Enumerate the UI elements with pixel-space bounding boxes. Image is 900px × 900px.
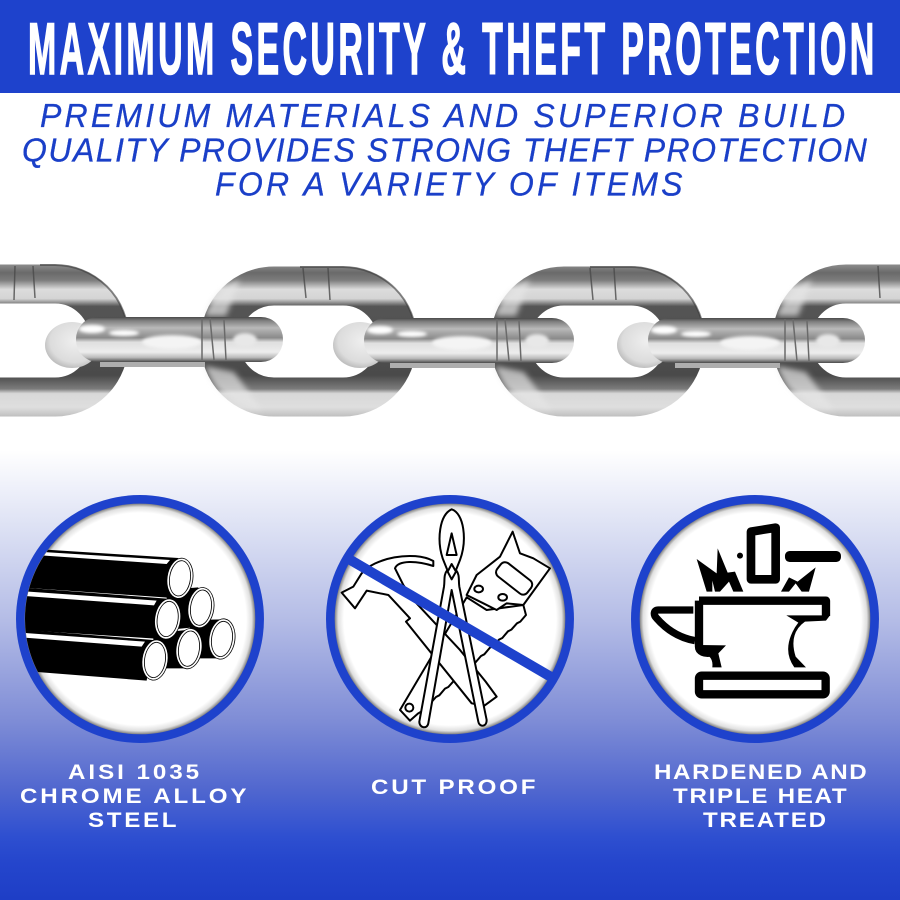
hammer <box>342 556 497 706</box>
back row pipes <box>153 587 223 668</box>
subtitle text block: QUALITY PROVIDES STRONG THEFT PROTECTION <box>22 132 867 169</box>
side-on link 3 <box>617 318 865 368</box>
forging hammer <box>737 528 841 579</box>
sparks <box>697 548 816 592</box>
bottom pipe <box>20 629 153 681</box>
header banner <box>0 0 900 93</box>
top pipe <box>23 549 178 598</box>
bolt cutter <box>419 509 487 727</box>
open links <box>0 284 900 397</box>
subtitle text block: FOR A VARIETY OF ITEMS <box>215 166 683 203</box>
middle pipe <box>20 587 167 639</box>
chain photo <box>0 265 900 410</box>
label: cut proof: CUT PROOF <box>371 775 535 799</box>
label: hardened and triple heat treated: TREATED <box>703 808 826 832</box>
badge: anvil and hammer icon <box>631 495 879 743</box>
subtitle text block: PREMIUM MATERIALS AND SUPERIOR BUILD <box>40 98 845 134</box>
prohibition slash <box>349 559 552 677</box>
subtitle text block <box>22 98 867 203</box>
hand saw <box>400 532 550 721</box>
link left-side highlights <box>205 280 834 410</box>
label: hardened and triple heat treated: TRIPLE HEAT <box>673 784 847 808</box>
label: aisi 1035 chrome alloy steel: STEEL <box>88 808 177 832</box>
badge: steel pipes icon <box>16 495 264 743</box>
label: hardened and triple heat treated: HARDENED AND <box>654 760 867 784</box>
title: MAXIMUM SECURITY & THEFT PROTECTION <box>28 9 874 91</box>
badge: cut proof tools icon <box>326 495 574 743</box>
welds on open links <box>14 266 880 300</box>
side-on link 2 <box>333 318 574 368</box>
label: aisi 1035 chrome alloy steel <box>20 760 247 832</box>
anvil body <box>654 601 826 694</box>
link outer edge shading <box>40 265 704 340</box>
pipe ends <box>139 556 238 682</box>
label: aisi 1035 chrome alloy steel: CHROME ALLOY <box>20 784 247 808</box>
label: hardened and triple heat treated <box>654 760 867 832</box>
label: aisi 1035 chrome alloy steel: AISI 1035 <box>68 760 199 784</box>
side-on link 1 <box>45 317 283 368</box>
